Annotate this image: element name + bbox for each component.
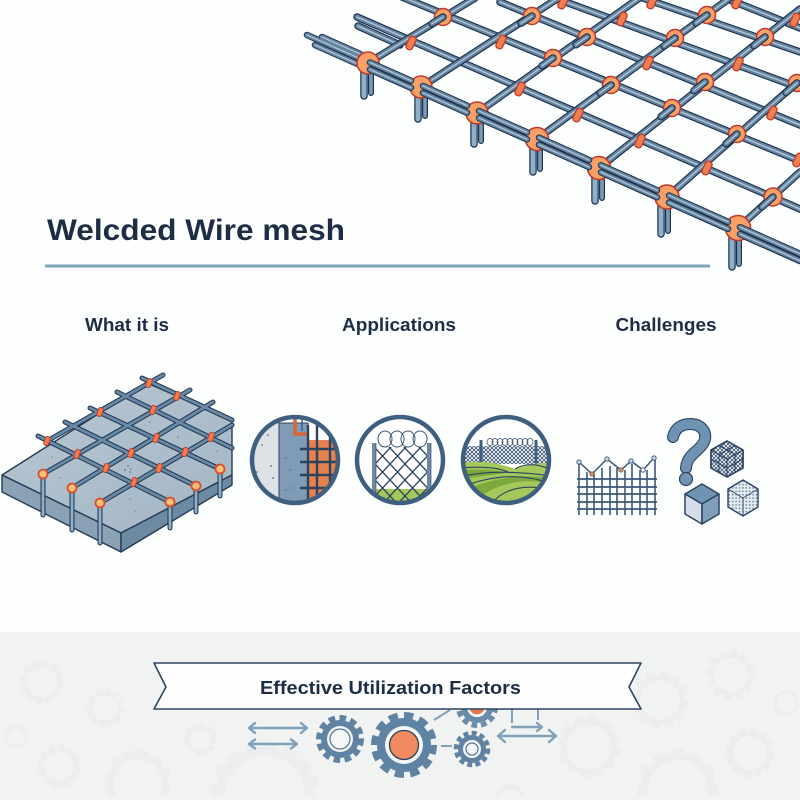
heading: challenges: Challenges (616, 315, 716, 335)
title: Welcded Wire mesh (47, 214, 345, 247)
icon: dotted cube (728, 480, 758, 516)
lengthwise bars (357, 0, 800, 209)
icon: solid cube (685, 484, 719, 524)
cross bars (368, 0, 800, 228)
panel background (0, 632, 800, 800)
front bar segments over welds (370, 62, 800, 261)
mesh legs (364, 72, 739, 267)
heading: what it is: What it is (85, 315, 169, 335)
bar ends entering medium welds (432, 15, 797, 207)
slab small welds (43, 378, 215, 487)
gear: small right (456, 733, 488, 765)
panel: effective utilization factors (0, 632, 800, 800)
slab speckles (51, 421, 218, 512)
banner ribbon (154, 663, 641, 709)
arrows: right pair (498, 723, 556, 742)
banner heading: Effective Utilization Factors (260, 677, 521, 698)
small welds (405, 0, 800, 176)
large welds (357, 52, 750, 240)
illustration: mesh on concrete slab (2, 375, 232, 552)
slab (2, 383, 232, 552)
front bars (307, 35, 800, 261)
chart: mesh grid with line (577, 456, 657, 515)
gear: main with orange core (374, 716, 434, 774)
gear: top, behind banner (458, 688, 496, 726)
title underline (45, 264, 710, 268)
faint background gears (6, 652, 797, 796)
gear: left (319, 718, 361, 760)
icon: wire mesh cube (711, 441, 743, 477)
medium welds (434, 6, 800, 206)
slab mesh bars (38, 375, 232, 503)
illustration: large welded wire mesh (307, 0, 800, 267)
icon: wall reinforcement (250, 415, 342, 505)
arrows: left pair (249, 723, 307, 748)
icon: farm field fence (460, 415, 552, 507)
slab front welds (38, 464, 224, 508)
heading: applications: Applications (342, 315, 456, 335)
icon: security fence (355, 415, 445, 505)
icon: question mark (673, 424, 705, 486)
slab legs (43, 469, 220, 543)
connector lines (434, 708, 538, 746)
